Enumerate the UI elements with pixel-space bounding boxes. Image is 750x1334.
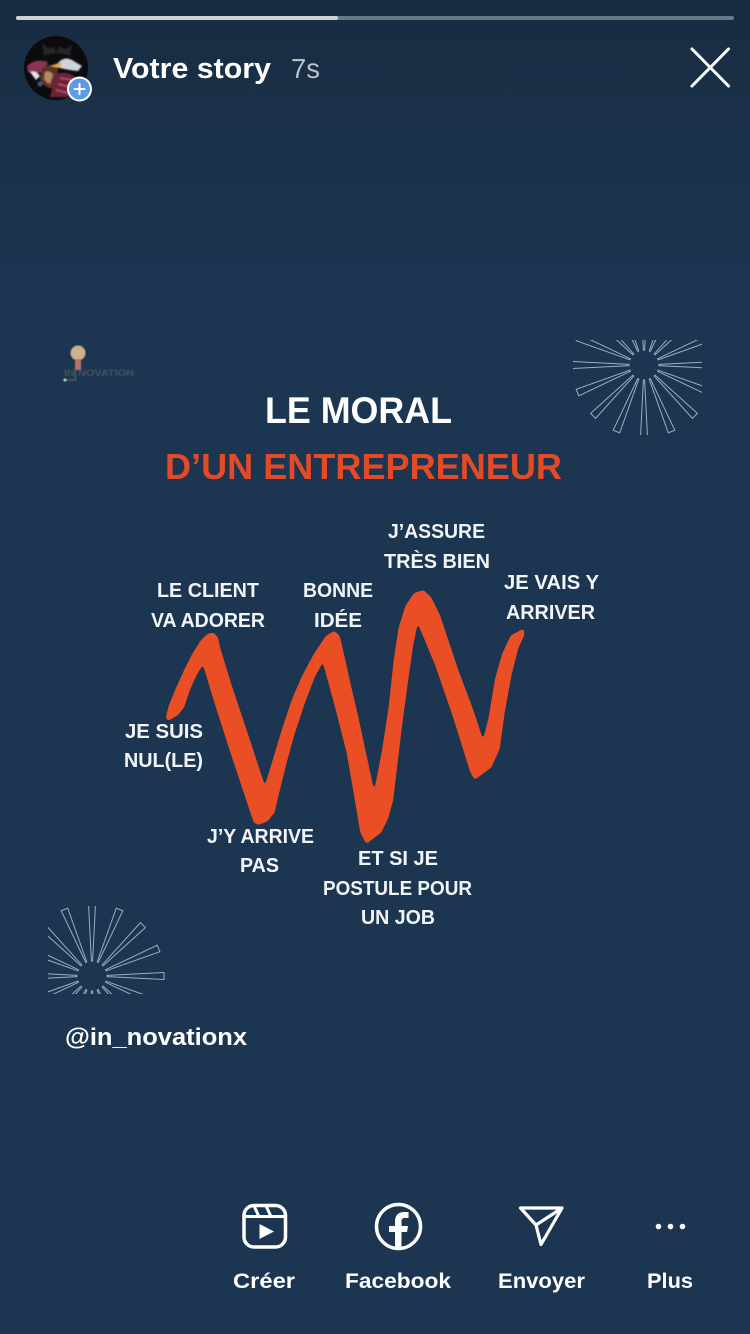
label: bonne idee: BONNE <box>303 580 373 602</box>
icon: reels <box>244 1206 286 1247</box>
logo <box>64 346 134 382</box>
logo: IN NOVATION <box>64 368 134 378</box>
label: le client va adorer <box>151 580 266 632</box>
decoration: bottom left sunburst <box>48 906 164 994</box>
action: envoyer: Envoyer <box>498 1270 585 1293</box>
label: je vais y arriver <box>504 572 600 624</box>
label: je vais y arriver: ARRIVER <box>506 602 596 624</box>
action: creer: Créer <box>233 1270 295 1293</box>
chart: morale wave <box>167 592 523 842</box>
story time: 7s <box>291 53 320 84</box>
action: facebook <box>345 1204 451 1293</box>
label: et si je postule pour un job: POSTULE POUR <box>323 878 473 900</box>
icon: close <box>692 49 728 86</box>
label: le client va adorer: LE CLIENT <box>157 580 259 602</box>
icon: paper plane <box>520 1208 562 1244</box>
story author name: Votre story <box>113 53 271 85</box>
panel: shared post <box>48 340 702 994</box>
action: envoyer <box>498 1208 585 1293</box>
decoration: top right sunburst <box>573 340 702 435</box>
mention tag: @in_novationx <box>65 1024 248 1051</box>
heading: d'un entrepreneur: D’UN ENTREPRENEUR <box>165 446 562 487</box>
action: plus: Plus <box>647 1270 693 1293</box>
label: et si je postule pour un job: UN JOB <box>361 907 435 929</box>
label: et si je postule pour un job <box>323 848 473 929</box>
action: creer <box>233 1206 295 1293</box>
heading: le moral: LE MORAL <box>265 390 452 431</box>
label: je suis nul(le): JE SUIS <box>125 721 203 743</box>
label: j'assure tres bien <box>384 521 490 573</box>
icon: profile avatar with add badge <box>24 36 92 102</box>
label: bonne idee <box>303 580 373 632</box>
label: j'y arrive pas: J’Y ARRIVE <box>207 826 314 848</box>
action: plus <box>647 1224 693 1293</box>
label: j'y arrive pas: PAS <box>240 855 279 877</box>
label: je vais y arriver: JE VAIS Y <box>504 572 600 594</box>
label: j'assure tres bien: TRÈS BIEN <box>384 550 490 573</box>
action: facebook: Facebook <box>345 1270 451 1293</box>
icon: facebook <box>376 1204 420 1248</box>
label: j'assure tres bien: J’ASSURE <box>388 521 485 543</box>
label: le client va adorer: VA ADORER <box>151 610 266 632</box>
icon: more dots <box>656 1224 685 1229</box>
label: bonne idee: IDÉE <box>314 609 362 632</box>
story progress bar <box>16 16 734 20</box>
label: je suis nul(le) <box>124 721 203 772</box>
label: et si je postule pour un job: ET SI JE <box>358 848 438 870</box>
label: j'y arrive pas <box>207 826 314 877</box>
label: je suis nul(le): NUL(LE) <box>124 750 203 772</box>
